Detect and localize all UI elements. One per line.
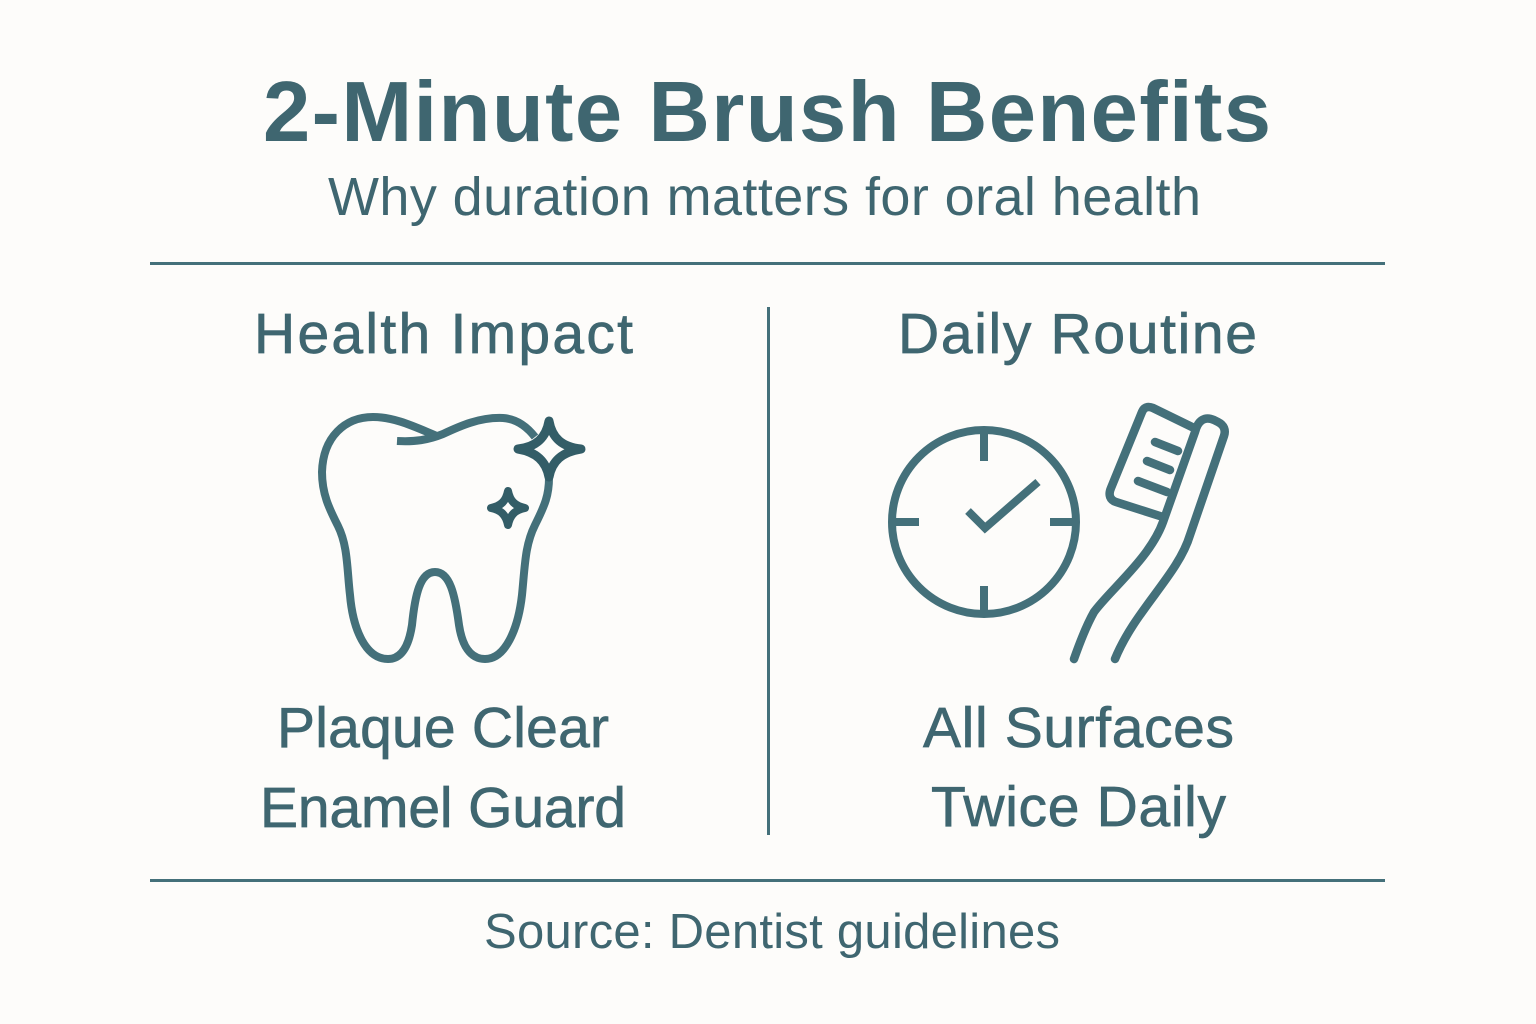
icon: clock with check: [892, 430, 1076, 614]
label: twice daily: Twice Daily: [931, 775, 1226, 839]
panel: daily routine: [892, 302, 1257, 839]
subtitle: Why duration matters for oral health: [328, 167, 1201, 227]
icon: toothbrush: [1074, 407, 1225, 659]
source note: Source: Dentist guidelines: [484, 905, 1060, 959]
icon: tooth with sparkles: [322, 417, 581, 659]
title: 2-Minute Brush Benefits: [263, 65, 1271, 160]
heading: health impact: Health Impact: [254, 302, 633, 366]
label: enamel guard: Enamel Guard: [260, 776, 626, 840]
label: plaque clear: Plaque Clear: [277, 696, 609, 760]
heading: daily routine: Daily Routine: [898, 302, 1257, 366]
panel: health impact: [254, 302, 633, 840]
label: all surfaces: All Surfaces: [923, 696, 1234, 760]
